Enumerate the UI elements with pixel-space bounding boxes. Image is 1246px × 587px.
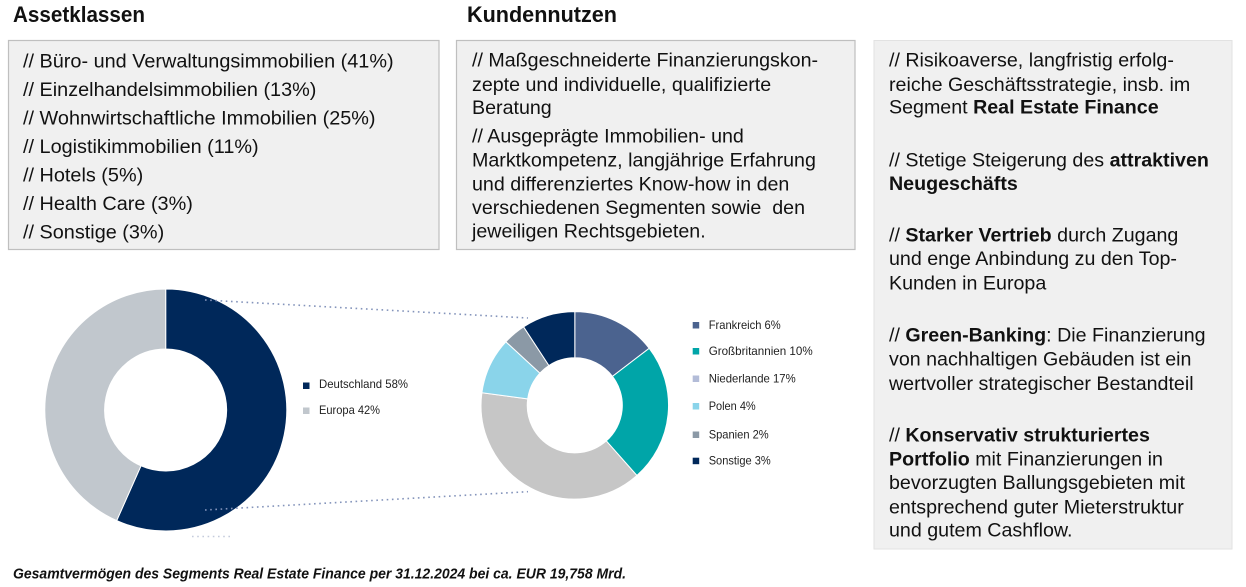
panel: Strategie: entsprechend guter Mieterstruktur	[889, 496, 1184, 518]
panel: Strategie: Kunden in Europa	[889, 272, 1046, 294]
footnote: Gesamtvermögen des Segments Real Estate Finance per 31.12.2024 bei ca. EUR 19,758 Mrd.	[13, 566, 626, 582]
legend: Deutschland / Europa	[303, 377, 408, 417]
panel: Strategie: und gutem Cashflow.	[889, 520, 1072, 542]
panel: Strategie: // Green-Banking: Die Finanzierung	[889, 325, 1206, 347]
panel: Strategie: Portfolio mit Finanzierungen in	[889, 449, 1163, 471]
panel: Strategie: Segment Real Estate Finance	[889, 96, 1159, 118]
legend: Europa breakdown: Niederlande 17%	[709, 372, 796, 386]
legend: Europa breakdown: Spanien 2%	[709, 428, 769, 442]
panel: Strategie: wertvoller strategischer Bestandteil	[888, 373, 1194, 395]
panel: Assetklassen: // Einzelhandelsimmobilien (13%)	[23, 79, 316, 101]
legend: Deutschland / Europa: Deutschland 58%	[319, 377, 408, 391]
panel: Assetklassen	[8, 40, 439, 250]
panel: Strategie: und enge Anbindung zu den Top-	[889, 248, 1177, 270]
panel: Kundennutzen	[456, 40, 855, 250]
panel: Kundennutzen: und differenziertes Know-how in den	[472, 174, 789, 196]
panel: Kundennutzen: // Maßgeschneiderte Finanzierungskon-	[472, 50, 818, 72]
legend: Europa breakdown	[693, 318, 813, 468]
connector: dotted lines between donuts	[192, 300, 528, 536]
panel: Kundennutzen: zepte und individuelle, qualifizierte	[472, 74, 771, 96]
legend: Europa breakdown: Polen 4%	[709, 399, 756, 413]
panel: Assetklassen: // Logistikimmobilien (11%)	[23, 136, 259, 158]
panel: Kundennutzen: // Ausgeprägte Immobilien- und	[472, 126, 744, 148]
panel: Strategie	[874, 40, 1232, 549]
legend: Europa breakdown: Frankreich 6%	[709, 318, 781, 332]
legend: Europa breakdown: Großbritannien 10%	[709, 344, 813, 358]
panel: Strategie: Neugeschäfts	[889, 173, 1018, 195]
chart: donut Deutschland / Europa	[45, 289, 287, 531]
panel: Strategie: // Starker Vertrieb durch Zugang	[889, 225, 1178, 247]
panel: Kundennutzen: jeweiligen Rechtsgebieten.	[471, 220, 706, 242]
panel: Assetklassen: // Hotels (5%)	[23, 165, 143, 187]
panel: Strategie: bevorzugten Ballungsgebieten mit	[889, 472, 1185, 494]
panel: Strategie: // Stetige Steigerung des attraktiven	[889, 150, 1209, 172]
panel: Assetklassen: // Health Care (3%)	[23, 193, 193, 215]
heading: Assetklassen: Assetklassen	[13, 2, 145, 27]
panel: Strategie: von nachhaltigen Gebäuden ist ein	[889, 349, 1191, 371]
legend: Deutschland / Europa: Europa 42%	[319, 403, 380, 417]
chart: donut Europa breakdown	[481, 312, 669, 499]
panel: Strategie: // Risikoaverse, langfristig erfolg-	[889, 50, 1174, 72]
panel: Kundennutzen: verschiedenen Segmenten sowie den	[472, 197, 805, 219]
panel: Strategie: reiche Geschäftsstrategie, insb. im	[889, 74, 1190, 96]
panel: Kundennutzen: Marktkompetenz, langjährige Erfahrung	[472, 150, 816, 172]
legend: Europa breakdown: Sonstige 3%	[709, 454, 771, 468]
panel: Strategie: // Konservativ strukturiertes	[889, 425, 1150, 447]
panel: Assetklassen: // Büro- und Verwaltungsimmobilien (41%)	[23, 51, 394, 73]
panel: Assetklassen: // Sonstige (3%)	[23, 222, 164, 244]
heading: Kundennutzen: Kundennutzen	[467, 2, 617, 27]
panel: Assetklassen: // Wohnwirtschaftliche Immobilien (25%)	[23, 108, 376, 130]
panel: Kundennutzen: Beratung	[472, 97, 552, 119]
